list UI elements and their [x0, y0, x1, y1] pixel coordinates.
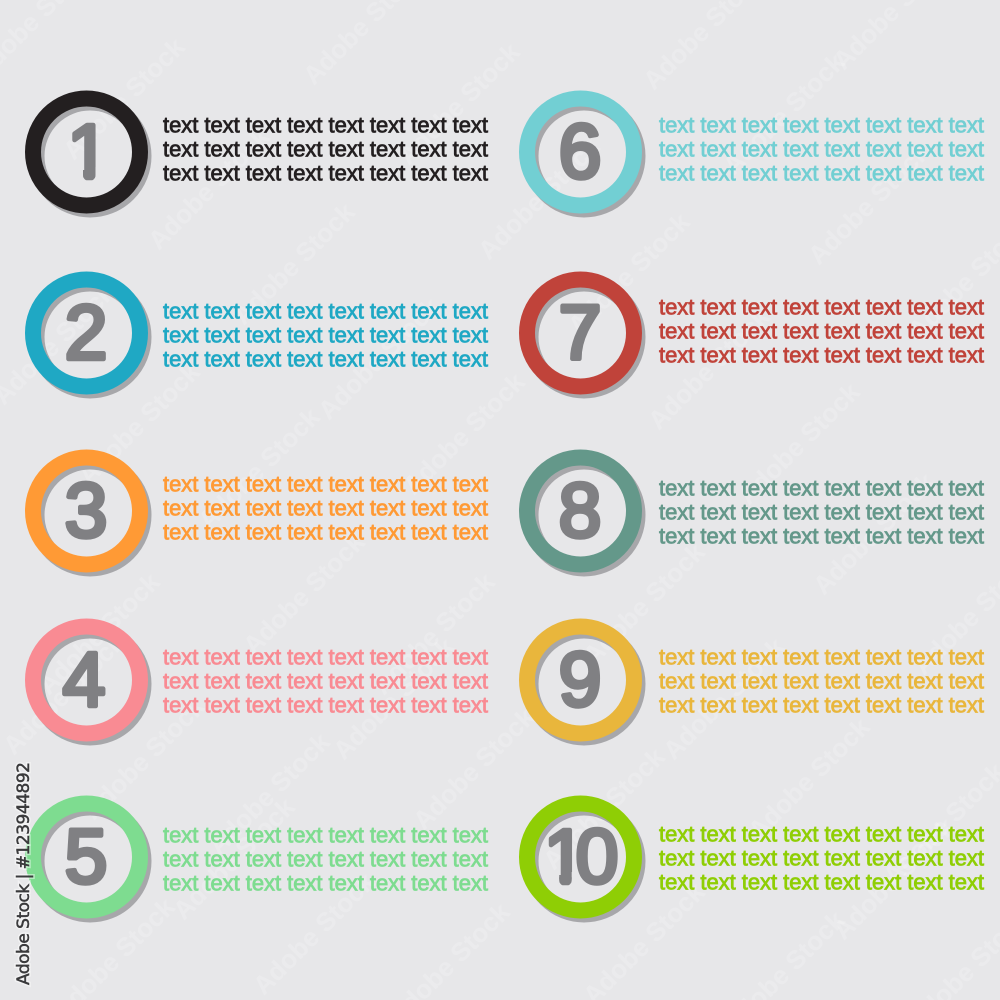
ring 8 — [527, 458, 638, 568]
text block 4: text text text text text text text text — [163, 668, 488, 694]
text block 9: text text text text text text text text — [659, 692, 984, 718]
text block 4: text text text text text text text text — [163, 692, 488, 718]
number 8: 8 — [559, 468, 601, 554]
watermark pattern: Adobe Stock — [717, 46, 851, 180]
text block 3: text text text text text text text text — [163, 520, 488, 544]
watermark pattern: Adobe Stock — [192, 401, 326, 535]
text block 6: text text text text text text text text — [659, 112, 984, 138]
item 6 — [527, 98, 984, 210]
stock id vertical label: Adobe Stock | #123944892 — [14, 762, 34, 985]
text block 3: text text text text text text text text — [163, 496, 488, 520]
item 4 — [33, 626, 488, 738]
text block 6: text text text text text text text text — [659, 160, 984, 186]
item 9 — [527, 626, 984, 738]
watermark pattern: Adobe Stock — [562, 206, 696, 340]
watermark pattern: Adobe Stock — [237, 526, 371, 660]
text block 5: text text text text text text text text — [163, 822, 488, 848]
text block 1: text text text text text text text text — [163, 136, 488, 162]
ring 5 — [33, 804, 144, 914]
item 10 — [527, 804, 984, 914]
item 1 — [33, 98, 488, 210]
watermark pattern: Adobe Stock — [367, 566, 501, 700]
watermark pattern: Adobe Stock — [807, 466, 941, 600]
watermark pattern: Adobe Stock — [227, 196, 361, 330]
text block 9: text text text text text text text text — [659, 668, 984, 694]
text block 2: text text text text text text text text — [163, 346, 488, 372]
watermark pattern: Adobe Stock — [732, 376, 866, 510]
watermark pattern: Adobe Stock — [802, 136, 936, 270]
item 3 — [33, 458, 488, 568]
watermark pattern: Adobe Stock — [0, 626, 131, 760]
watermark pattern: Adobe Stock — [202, 726, 336, 860]
watermark pattern: Adobe Stock — [32, 566, 166, 700]
ring 9 — [527, 626, 638, 738]
item 7 — [527, 280, 984, 390]
watermark pattern: Adobe Stock — [327, 631, 461, 765]
text block 6 — [659, 112, 984, 186]
watermark pattern: Adobe Stock — [312, 291, 446, 425]
number 9: 9 — [559, 637, 601, 723]
ring 1 — [33, 98, 144, 210]
watermark pattern: Adobe Stock — [72, 356, 206, 490]
watermark pattern: Adobe Stock — [142, 121, 276, 255]
watermark pattern: Adobe Stock — [657, 631, 791, 765]
text block 7: text text text text text text text text — [659, 342, 984, 368]
text block 5 — [163, 822, 488, 896]
text block 7: text text text text text text text text — [659, 294, 984, 320]
text block 7 — [659, 294, 984, 368]
text block 9 — [659, 644, 984, 718]
item 5 — [33, 804, 488, 914]
text block 2: text text text text text text text text — [163, 322, 488, 348]
ring 4 — [33, 626, 144, 738]
text block 4: text text text text text text text text — [163, 644, 488, 670]
ring 7 — [527, 280, 638, 390]
number 6: 6 — [559, 109, 601, 195]
watermark pattern: Adobe Stock — [77, 691, 211, 825]
number 4: 4 — [63, 637, 105, 723]
watermark pattern: Adobe Stock — [642, 301, 776, 435]
watermark pattern: Adobe Stock — [392, 36, 526, 170]
watermark pattern: Adobe Stock — [167, 791, 301, 925]
text block 10: text text text text text text text text — [659, 846, 984, 870]
text block 6: text text text text text text text text — [659, 136, 984, 162]
watermark pattern: Adobe Stock — [577, 536, 711, 670]
text block 8 — [659, 476, 984, 548]
watermark pattern: Adobe Stock — [472, 131, 606, 265]
watermark pattern: Adobe Stock — [537, 741, 671, 875]
text block 3: text text text text text text text text — [163, 472, 488, 496]
ring 2 — [33, 280, 144, 390]
number 2: 2 — [65, 290, 107, 376]
text block 1: text text text text text text text text — [163, 112, 488, 138]
text block 2 — [163, 298, 488, 372]
watermark pattern: Adobe Stock — [407, 701, 541, 835]
text block 10: text text text text text text text text — [659, 822, 984, 846]
text block 3 — [163, 472, 488, 544]
text block 4 — [163, 644, 488, 718]
text block 2: text text text text text text text text — [163, 298, 488, 324]
text block 8: text text text text text text text text — [659, 500, 984, 524]
ring 10 — [527, 804, 638, 914]
text block 7: text text text text text text text text — [659, 318, 984, 344]
stock id vertical label: Adobe Stock | #123944892 — [14, 762, 34, 985]
number 7: 7 — [559, 290, 601, 376]
item 2 — [33, 280, 488, 390]
watermark pattern: Adobe Stock — [742, 711, 876, 845]
text block 9: text text text text text text text text — [659, 644, 984, 670]
watermark pattern: Adobe Stock — [57, 31, 191, 165]
watermark pattern: Adobe Stock — [397, 366, 531, 500]
text block 1 — [163, 112, 488, 186]
ring 6 — [527, 98, 638, 210]
number 3: 3 — [65, 468, 107, 554]
text block 8: text text text text text text text text — [659, 524, 984, 548]
text block 5: text text text text text text text text — [163, 846, 488, 872]
watermark pattern: Adobe Stock — [827, 811, 961, 945]
number 10 — [548, 826, 618, 886]
text block 1: text text text text text text text text — [163, 160, 488, 186]
watermark pattern: Adobe Stock — [247, 866, 381, 1000]
text block 10 — [659, 822, 984, 894]
number 1: 1 — [67, 109, 110, 195]
text block 8: text text text text text text text text — [659, 476, 984, 500]
text block 5: text text text text text text text text — [163, 870, 488, 896]
item 8 — [527, 458, 984, 568]
ring 3 — [33, 458, 144, 568]
text block 10: text text text text text text text text — [659, 870, 984, 894]
number 10: 0 — [576, 814, 618, 900]
number 10: 1 — [544, 814, 586, 900]
number 5: 5 — [65, 814, 107, 900]
